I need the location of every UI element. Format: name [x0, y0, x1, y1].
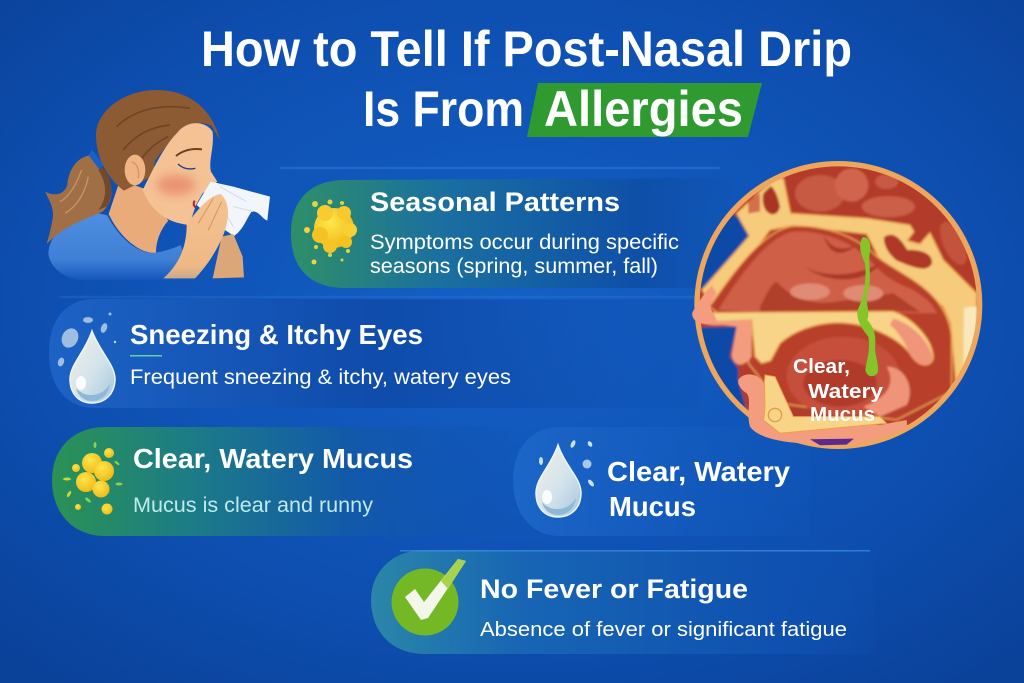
- heading: clear watery mucus: [607, 456, 790, 522]
- green mucus strand: [857, 237, 878, 376]
- bone upper: [702, 178, 977, 392]
- text: seasonal description: seasons (spring, summer, fall): [370, 255, 658, 278]
- jaw bone: [763, 375, 887, 433]
- icon: water drop: [536, 440, 595, 517]
- title: How to Tell If Post-Nasal Drip: [201, 21, 852, 77]
- text: sneezing description: Frequent sneezing & itchy, watery eyes: [130, 366, 511, 389]
- heading: seasonal patterns: Seasonal Patterns: [370, 187, 620, 217]
- palate: [712, 311, 933, 365]
- heading: clear watery mucus: Clear, Watery Mucus: [133, 443, 413, 474]
- icon: yellow mucus bubbles: [63, 442, 122, 514]
- heading: sneezing and itchy eyes: Sneezing & Itchy Eyes: [130, 319, 423, 350]
- highlight: Allergies: Allergies: [544, 81, 743, 137]
- text: seasonal description: [370, 231, 679, 278]
- panel: sneezing and itchy eyes: [49, 299, 700, 408]
- icon: pollen cluster: [304, 200, 357, 264]
- nose tip overlap: [692, 288, 717, 324]
- nose and upper lip: [693, 285, 752, 365]
- purple gap under jaw: [810, 439, 854, 445]
- label: clear watery mucus: Clear,: [793, 356, 850, 378]
- text: seasonal description: Symptoms occur during specific: [370, 231, 679, 254]
- panel: clear watery mucus, blue: [513, 427, 810, 536]
- upper tissue: [795, 175, 845, 212]
- text: mucus description: Mucus is clear and runny: [133, 494, 374, 517]
- outside blue gaps: [700, 213, 750, 292]
- title: Is From: [363, 81, 524, 137]
- panel: no fever or fatigue: [371, 550, 875, 654]
- label: clear watery mucus: [793, 356, 884, 426]
- label: clear watery mucus: Watery: [808, 381, 884, 403]
- text: no fever description: Absence of fever or significant fatigue: [480, 619, 847, 641]
- icon: green check mark: [392, 559, 466, 636]
- panel: seasonal patterns: [291, 178, 730, 288]
- oral cavity: [787, 337, 900, 417]
- lower lip and jaw overlap: [738, 374, 907, 444]
- panel: clear watery mucus, green: [52, 427, 510, 536]
- nasal cavity: [709, 226, 952, 420]
- tongue: [863, 367, 910, 417]
- title: [201, 21, 852, 137]
- heading: clear watery mucus: Clear, Watery: [607, 456, 790, 487]
- icon: water drop with droplets: [57, 312, 116, 403]
- diagram: nasal cross-section: [692, 161, 982, 449]
- label: clear watery mucus: Mucus: [810, 404, 875, 426]
- illustration: woman sneezing into tissue: [45, 90, 270, 280]
- heading: clear watery mucus: Mucus: [609, 491, 696, 522]
- heading: no fever or fatigue: No Fever or Fatigue: [480, 574, 748, 604]
